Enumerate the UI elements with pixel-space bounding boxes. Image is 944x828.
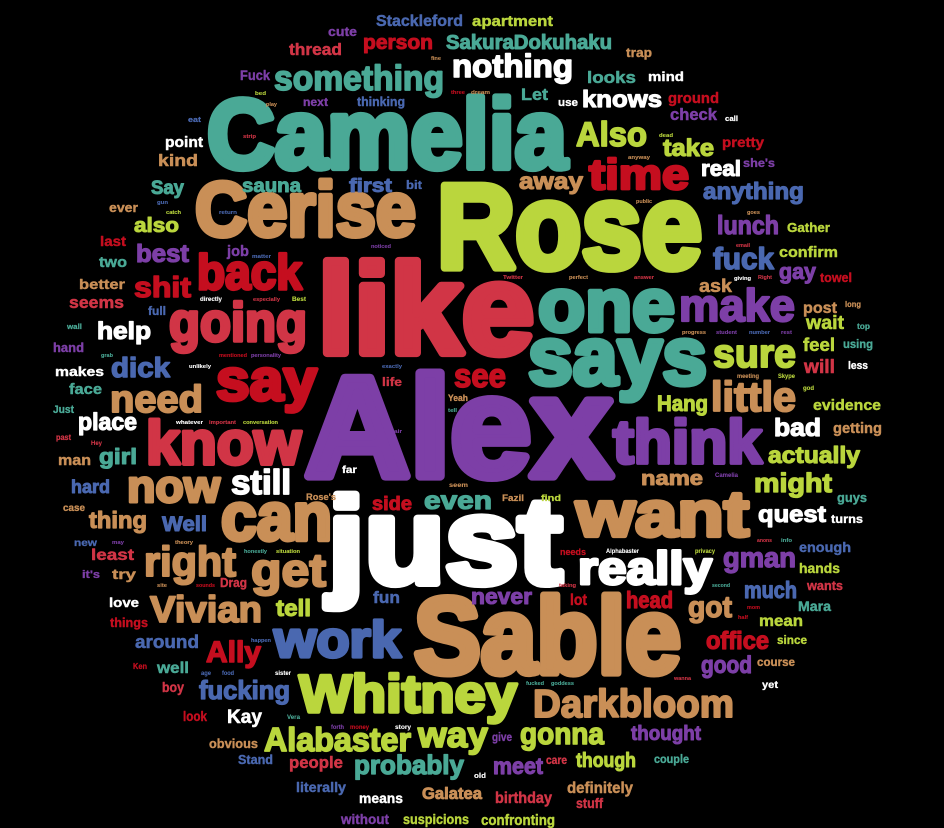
- word: head: head: [626, 587, 673, 613]
- small words: looks: [587, 68, 636, 87]
- word: fuck: fuck: [713, 241, 775, 276]
- small words: cute: [328, 24, 357, 39]
- largest words: [127, 79, 762, 724]
- tiny words: noticed: [371, 244, 391, 250]
- word: bad: bad: [774, 414, 821, 442]
- word: Say: Say: [151, 178, 184, 199]
- tiny words: dead: [659, 133, 673, 139]
- small words: look: [183, 708, 207, 724]
- tiny words: answer: [634, 275, 654, 281]
- small words: new: [74, 538, 97, 549]
- small words: ever: [109, 200, 138, 215]
- tiny words: directly: [200, 297, 223, 303]
- tiny words: second: [712, 583, 730, 589]
- word: though: though: [576, 750, 636, 772]
- small words: yet: [762, 680, 779, 691]
- small words: care: [546, 753, 567, 767]
- word: nothing: nothing: [452, 48, 573, 84]
- word: got: got: [688, 591, 732, 624]
- small words: face: [69, 381, 102, 398]
- small words: ground: [668, 90, 719, 107]
- tiny words: tell: [448, 408, 458, 414]
- tiny words: air: [394, 429, 402, 435]
- small words: enough: [799, 539, 851, 555]
- word: away: away: [519, 168, 583, 194]
- tiny words: Right: [758, 275, 772, 281]
- word: Well: Well: [162, 513, 207, 536]
- small words: means: [359, 790, 403, 806]
- small words: Drag: [220, 575, 247, 590]
- small words: obvious: [209, 736, 258, 751]
- word: Ally: Ally: [206, 636, 261, 669]
- small words: things: [110, 615, 148, 630]
- word: just: just: [326, 473, 562, 609]
- tiny words: return: [219, 210, 237, 216]
- tiny words: perfect: [569, 275, 588, 281]
- small words: feel: [803, 335, 835, 355]
- word: tell: tell: [276, 595, 311, 621]
- small words: Rose's: [306, 492, 336, 502]
- small words: Stand: [238, 752, 273, 767]
- tiny words: sister: [275, 671, 292, 677]
- tiny words: may: [112, 540, 124, 546]
- word: think: think: [613, 408, 762, 476]
- word: actually: actually: [768, 442, 860, 468]
- tiny words: god: [803, 386, 814, 392]
- word: says: says: [528, 311, 707, 402]
- word: SakuraDokuhaku: SakuraDokuhaku: [446, 32, 612, 54]
- tiny words: grab: [101, 353, 113, 359]
- tiny words: Skype: [778, 374, 796, 380]
- word: say: say: [216, 348, 317, 413]
- tiny words: anyway: [628, 155, 650, 161]
- tiny words: Alphabaster: [606, 549, 640, 555]
- small words: confirm: [779, 244, 838, 261]
- word: side: side: [372, 494, 412, 515]
- word: time: time: [589, 151, 689, 199]
- word: can: can: [221, 479, 332, 555]
- tiny words: rest: [781, 330, 792, 336]
- small words: wants: [806, 578, 843, 593]
- tiny words: site: [157, 583, 167, 589]
- word: fucking: fucking: [199, 675, 290, 705]
- word: gman: gman: [723, 542, 796, 573]
- small words: suspicions: [403, 811, 469, 827]
- small words: man: [58, 452, 91, 469]
- word: back: back: [197, 246, 303, 300]
- small words: it's: [82, 569, 100, 581]
- small words: try: [112, 566, 136, 582]
- small words: couple: [654, 752, 689, 766]
- tiny words: bed: [255, 91, 266, 97]
- tiny words: situation: [276, 549, 300, 555]
- small words: life: [382, 375, 402, 389]
- tiny words: info: [781, 538, 792, 544]
- word: gay: gay: [779, 259, 817, 284]
- word: right: right: [144, 538, 236, 585]
- small words: love: [109, 595, 139, 610]
- word: Whitney: Whitney: [299, 665, 518, 724]
- word: need: need: [110, 379, 203, 421]
- tiny words: progress: [682, 330, 706, 336]
- small words: definitely: [567, 780, 633, 797]
- word: anything: anything: [703, 178, 804, 204]
- tiny words: giving: [734, 276, 751, 282]
- tiny words: age: [201, 671, 212, 677]
- small words: long: [845, 300, 861, 309]
- tiny words: [91, 56, 814, 780]
- tiny words: catch: [166, 210, 181, 216]
- small words: Mara: [798, 598, 831, 614]
- tiny words: Vera: [287, 715, 301, 721]
- small words: hand: [53, 340, 84, 355]
- word: want: want: [575, 478, 749, 550]
- small words: without: [340, 811, 389, 827]
- word: gonna: gonna: [520, 716, 605, 751]
- word: really: really: [578, 542, 712, 594]
- tiny words: goddess: [551, 681, 574, 687]
- tiny words: public: [636, 199, 652, 205]
- tiny words: dream: [471, 90, 491, 96]
- small words: towel: [820, 270, 852, 285]
- small words: give: [492, 730, 512, 744]
- small words: literally: [296, 779, 346, 795]
- word: thing: thing: [89, 507, 147, 533]
- small words: bit: [406, 178, 422, 192]
- small words: people: [289, 753, 343, 772]
- tiny words: especially: [253, 297, 280, 303]
- tiny words: exactly: [382, 364, 402, 370]
- word: work: work: [273, 611, 402, 668]
- word: hard: hard: [71, 477, 110, 497]
- tiny words: mentioned: [219, 353, 247, 359]
- word: sure: sure: [713, 332, 796, 376]
- tiny words: goes: [747, 210, 760, 216]
- small words: less: [848, 360, 868, 372]
- small words: Gather: [787, 220, 830, 235]
- small words: point: [165, 134, 203, 151]
- small words: she's: [743, 156, 775, 170]
- tiny words: strip: [243, 134, 256, 140]
- small words: getting: [833, 420, 882, 437]
- word: probably: probably: [354, 750, 464, 780]
- word: still: still: [231, 464, 291, 502]
- small words: two: [99, 254, 127, 271]
- word: something: something: [274, 59, 444, 98]
- word: Vivian: Vivian: [150, 589, 262, 630]
- word: see: see: [454, 357, 506, 394]
- small words: Let: [521, 85, 548, 104]
- word: quest: quest: [758, 501, 826, 527]
- small words: case: [63, 503, 85, 514]
- small words: pretty: [722, 134, 764, 150]
- small words: kind: [158, 151, 198, 170]
- small words: Stackleford: [376, 13, 463, 30]
- word: girl: girl: [99, 444, 137, 469]
- tiny words: taking: [559, 583, 576, 589]
- small words: Fuck: [240, 67, 270, 83]
- tiny words: conversation: [243, 420, 278, 426]
- tiny words: Twitter: [503, 275, 523, 281]
- small words: will: [803, 357, 835, 378]
- tiny words: half: [738, 615, 748, 621]
- word: good: good: [701, 652, 752, 679]
- word: Darkbloom: Darkbloom: [533, 683, 734, 726]
- tiny words: sounds: [196, 583, 215, 589]
- tiny words: food: [222, 671, 234, 677]
- small words: eat: [188, 117, 202, 124]
- word: Hang: Hang: [657, 391, 708, 416]
- small words: boy: [162, 679, 184, 695]
- small words: far: [342, 465, 357, 476]
- word: never: never: [471, 584, 532, 609]
- word: office: office: [706, 627, 769, 655]
- word: shit: shit: [134, 272, 191, 304]
- word: much: much: [744, 577, 797, 603]
- tiny words: fucked: [526, 681, 544, 687]
- word: real: real: [701, 156, 741, 181]
- small words: ask: [699, 276, 733, 296]
- word: might: might: [754, 468, 832, 498]
- word: one: one: [538, 263, 675, 347]
- small words: seems: [69, 293, 124, 312]
- small words: post: [803, 300, 838, 317]
- small words: next: [303, 95, 328, 109]
- small words: Kay: [227, 707, 262, 728]
- tiny words: anons: [757, 538, 772, 544]
- small words: wait: [805, 313, 845, 334]
- tiny words: privacy: [695, 549, 716, 555]
- word: way: way: [417, 714, 488, 755]
- small words: past: [56, 433, 71, 442]
- tiny words: meeting: [737, 374, 759, 380]
- word: dick: dick: [111, 352, 170, 383]
- tiny words: unlikely: [189, 364, 211, 370]
- small words: thinking: [357, 94, 405, 109]
- word: Rose: Rose: [437, 160, 702, 294]
- tiny words: personality: [251, 353, 281, 359]
- small words: course: [757, 655, 795, 669]
- tiny words: old: [474, 773, 486, 780]
- word: Cerise: Cerise: [195, 167, 416, 253]
- tiny words: forth: [331, 725, 344, 731]
- small words: since: [777, 633, 807, 647]
- small words: birthday: [495, 790, 552, 807]
- word: also: also: [134, 215, 179, 237]
- tiny words: honestly: [244, 549, 267, 555]
- tiny words: gun: [157, 200, 168, 206]
- word: know: know: [146, 409, 302, 477]
- tiny words: play: [266, 102, 277, 108]
- small words: mind: [648, 69, 684, 84]
- tiny words: email: [736, 243, 751, 249]
- word: Also: Also: [576, 116, 647, 154]
- word: place: place: [78, 409, 137, 436]
- word: take: take: [663, 135, 714, 162]
- tiny words: important: [209, 420, 236, 426]
- small words: around: [135, 632, 199, 652]
- word: knows: knows: [582, 86, 662, 112]
- small words: top: [857, 322, 870, 331]
- word: Alex: Alex: [305, 348, 612, 507]
- tiny words: happen: [251, 638, 271, 644]
- small words: better: [79, 276, 126, 292]
- small words: well: [156, 660, 189, 677]
- tiny words: matter: [252, 254, 271, 260]
- small words: lot: [570, 592, 588, 609]
- word: Alabaster: Alabaster: [264, 721, 411, 758]
- tiny words: whatever: [175, 420, 203, 426]
- small words: apartment: [472, 13, 553, 30]
- small words: fun: [373, 588, 400, 607]
- word: Galatea: Galatea: [422, 784, 483, 803]
- small words: call: [725, 116, 738, 123]
- word: lunch: lunch: [717, 210, 779, 240]
- word: meet: meet: [493, 753, 543, 779]
- word: going: going: [169, 291, 307, 353]
- small words: full: [148, 304, 166, 318]
- word: get: get: [251, 544, 326, 596]
- small words: job: [226, 243, 249, 260]
- tiny words: wanna: [673, 676, 691, 682]
- word: help: help: [97, 318, 151, 345]
- small words: guys: [837, 490, 867, 505]
- small words: Just: [53, 404, 74, 416]
- tiny words: seem: [449, 483, 468, 489]
- small words: stuff: [576, 795, 603, 811]
- small words: turns: [831, 512, 863, 526]
- small words: evidence: [813, 397, 881, 414]
- tiny words: mom: [747, 605, 761, 611]
- small words: mean: [759, 613, 803, 630]
- small words: find: [541, 493, 561, 503]
- small words: thread: [289, 40, 342, 59]
- tiny words: money: [350, 725, 370, 731]
- small words: trap: [626, 45, 652, 60]
- word: make: make: [679, 280, 795, 331]
- small words: last: [100, 233, 126, 249]
- word: sauna: sauna: [242, 176, 301, 197]
- small words: hands: [799, 560, 840, 576]
- tiny words: Best: [292, 297, 306, 303]
- small words: check: [670, 105, 718, 124]
- word: Sable: Sable: [414, 575, 681, 696]
- small words: needs: [560, 547, 586, 557]
- small words: Yeah: [448, 393, 468, 403]
- word: now: now: [127, 461, 221, 512]
- small words: makes: [55, 364, 104, 379]
- word: Camelia: Camelia: [207, 79, 568, 189]
- word: even: even: [424, 487, 492, 515]
- tiny words: theory: [175, 540, 193, 546]
- word: first: first: [349, 176, 393, 197]
- tiny words: number: [749, 330, 770, 336]
- small words: using: [843, 337, 873, 351]
- tiny words: Hey: [91, 441, 103, 447]
- word: person: person: [363, 32, 433, 54]
- medium words: [71, 32, 860, 803]
- word: best: best: [136, 240, 190, 268]
- small words: Fazil: [502, 493, 524, 503]
- word: name: name: [641, 468, 703, 490]
- word: thought: thought: [631, 723, 701, 745]
- tiny words: story: [395, 725, 412, 731]
- small words: use: [558, 97, 578, 109]
- tiny words: student: [716, 330, 737, 336]
- small words: wall: [66, 324, 82, 331]
- word: like: like: [318, 238, 534, 380]
- tiny words: fine: [431, 56, 441, 62]
- small words: Ken: [133, 662, 147, 671]
- small words: least: [91, 547, 135, 564]
- tiny words: three: [451, 90, 465, 96]
- tiny words: Camelia: [715, 473, 739, 479]
- word: little: little: [711, 373, 796, 420]
